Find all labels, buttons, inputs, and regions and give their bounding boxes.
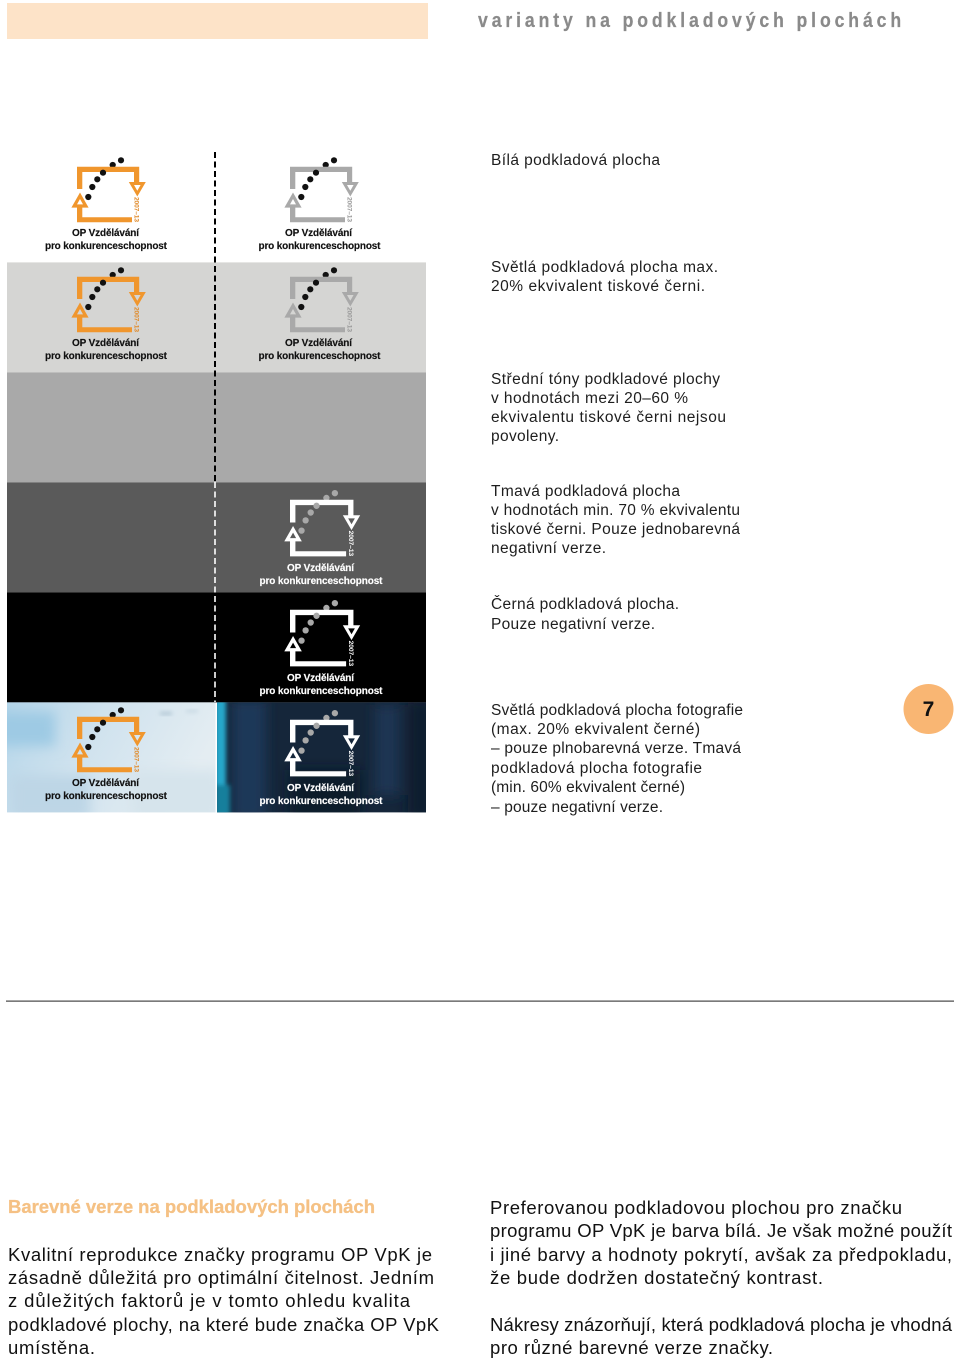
logo: negative on dark photo: OP Vzdělávání xyxy=(287,783,355,794)
text: photo backgrounds: (min. 60% ekvivalent černé) xyxy=(491,779,685,796)
text: right column: že bude dodržen dostatečný kontrast. xyxy=(490,1267,823,1288)
text: photo backgrounds: (max. 20% ekvivalent černé) xyxy=(491,721,700,738)
logo: negative on black: OP Vzdělávání xyxy=(287,673,355,684)
text: mid tones not allowed: povoleny. xyxy=(491,428,559,445)
heading: colour versions: Barevné verze na podkladových plochách xyxy=(8,1196,375,1217)
logo: full colour on light photo xyxy=(45,707,168,802)
logo: negative on black xyxy=(260,600,383,697)
text: right column: i jiné barvy a hodnoty pokrytí, avšak za předpokladu, xyxy=(490,1244,952,1265)
logo: full colour on white xyxy=(45,157,168,252)
logo: full colour on white: OP Vzdělávání xyxy=(72,228,140,239)
logo: full colour on light grey xyxy=(45,267,168,362)
text: dark background: negativní verze. xyxy=(491,540,606,557)
text: left column xyxy=(8,1244,440,1358)
logo: full colour on light photo: OP Vzdělávání xyxy=(72,778,140,789)
logo: negative on dark grey: 2007–13 xyxy=(347,531,354,556)
logo: grey on white: 2007–13 xyxy=(346,197,353,222)
logo: grey on light grey xyxy=(258,267,381,362)
text: photo backgrounds: – pouze plnobarevná verze. Tmavá xyxy=(491,740,741,757)
logo: negative on black: 2007–13 xyxy=(347,641,354,666)
logo: negative on dark photo: 2007–13 xyxy=(347,751,354,776)
logo: full colour on light grey: OP Vzdělávání xyxy=(72,338,140,349)
text: light background: 20% ekvivalent tiskové černi. xyxy=(491,278,705,295)
logo: grey on light grey: pro konkurenceschopnost xyxy=(258,351,381,362)
logo: negative on dark grey xyxy=(260,490,383,587)
text: right column: Preferovanou podkladovou plochou pro značku xyxy=(490,1197,902,1218)
text: right column: Nákresy znázorňují, která podkladová plocha je vhodná xyxy=(490,1314,953,1335)
text: left column: podkladové plochy, na které bude značka OP VpK xyxy=(8,1314,440,1335)
text: black background xyxy=(491,596,679,633)
text: left column: Kvalitní reprodukce značky programu OP VpK je xyxy=(8,1244,432,1265)
logo: grey on white: OP Vzdělávání xyxy=(285,228,353,239)
text: dark background: Tmavá podkladová plocha xyxy=(491,483,680,500)
logo: grey on light grey: 2007–13 xyxy=(346,307,353,332)
text: mid tones not allowed: ekvivalentu tiskové černi nejsou xyxy=(491,409,726,426)
logo: full colour on white: pro konkurenceschopnost xyxy=(45,241,168,252)
panel: background swatches xyxy=(7,262,426,702)
logo: grey on white xyxy=(258,157,381,252)
logo: full colour on light grey: 2007–13 xyxy=(133,307,140,332)
text: light background xyxy=(491,259,718,295)
divider: dashed fold line xyxy=(214,152,216,702)
text: black background: Černá podkladová plocha. xyxy=(491,596,679,613)
text: white background: Bílá podkladová plocha xyxy=(491,152,660,169)
text: photo backgrounds: – pouze negativní verze. xyxy=(491,799,663,816)
text: black background: Pouze negativní verze. xyxy=(491,616,655,633)
logo: grey on light grey: OP Vzdělávání xyxy=(285,338,353,349)
heading: variants on backgrounds: varianty na podkladových plochách xyxy=(478,10,901,32)
text: dark background: tiskové černi. Pouze jednobarevná xyxy=(491,521,740,538)
logo: full colour on light photo: 2007–13 xyxy=(133,747,140,772)
logo: negative on dark photo: pro konkurenceschopnost xyxy=(260,796,383,807)
text: mid tones not allowed: v hodnotách mezi 20–60 % xyxy=(491,390,688,407)
logo: negative on dark grey: pro konkurenceschopnost xyxy=(260,576,383,587)
logo: full colour on white: 2007–13 xyxy=(133,197,140,222)
text: mid tones not allowed: Střední tóny podkladové plochy xyxy=(491,371,720,388)
text: light background: Světlá podkladová plocha max. xyxy=(491,259,718,276)
text: dark background xyxy=(491,483,740,557)
panel: light photo background xyxy=(7,702,216,812)
text: left column: umístěna. xyxy=(8,1337,95,1358)
text: mid tones not allowed xyxy=(491,371,726,445)
logo: negative on dark grey: OP Vzdělávání xyxy=(287,563,355,574)
text: right column: programu OP VpK je barva bílá. Je však možné použít xyxy=(490,1220,952,1241)
text: photo backgrounds: podkladová plocha fotografie xyxy=(491,760,702,777)
logo: negative on dark photo xyxy=(260,710,383,807)
logo: full colour on light photo: pro konkurenceschopnost xyxy=(45,791,168,802)
text: dark background: v hodnotách min. 70 % ekvivalentu xyxy=(491,502,740,519)
page number badge xyxy=(904,684,954,734)
text: left column: z důležitých faktorů je v tomto ohledu kvalita xyxy=(8,1290,411,1311)
text: left column: zásadně důležitá pro optimální čitelnost. Jedním xyxy=(8,1267,434,1288)
logo: grey on white: pro konkurenceschopnost xyxy=(258,241,381,252)
logo: full colour on light grey: pro konkurenceschopnost xyxy=(45,351,168,362)
text: photo backgrounds: Světlá podkladová plocha fotografie xyxy=(491,702,743,719)
text: photo backgrounds xyxy=(491,702,743,816)
header colour bar xyxy=(7,3,428,39)
text: right column xyxy=(490,1197,953,1358)
panel: dark photo background xyxy=(217,702,426,812)
logo: negative on black: pro konkurenceschopnost xyxy=(260,686,383,697)
text: right column: pro různé barevné verze značky. xyxy=(490,1337,773,1358)
page number badge: 7 xyxy=(923,698,934,721)
